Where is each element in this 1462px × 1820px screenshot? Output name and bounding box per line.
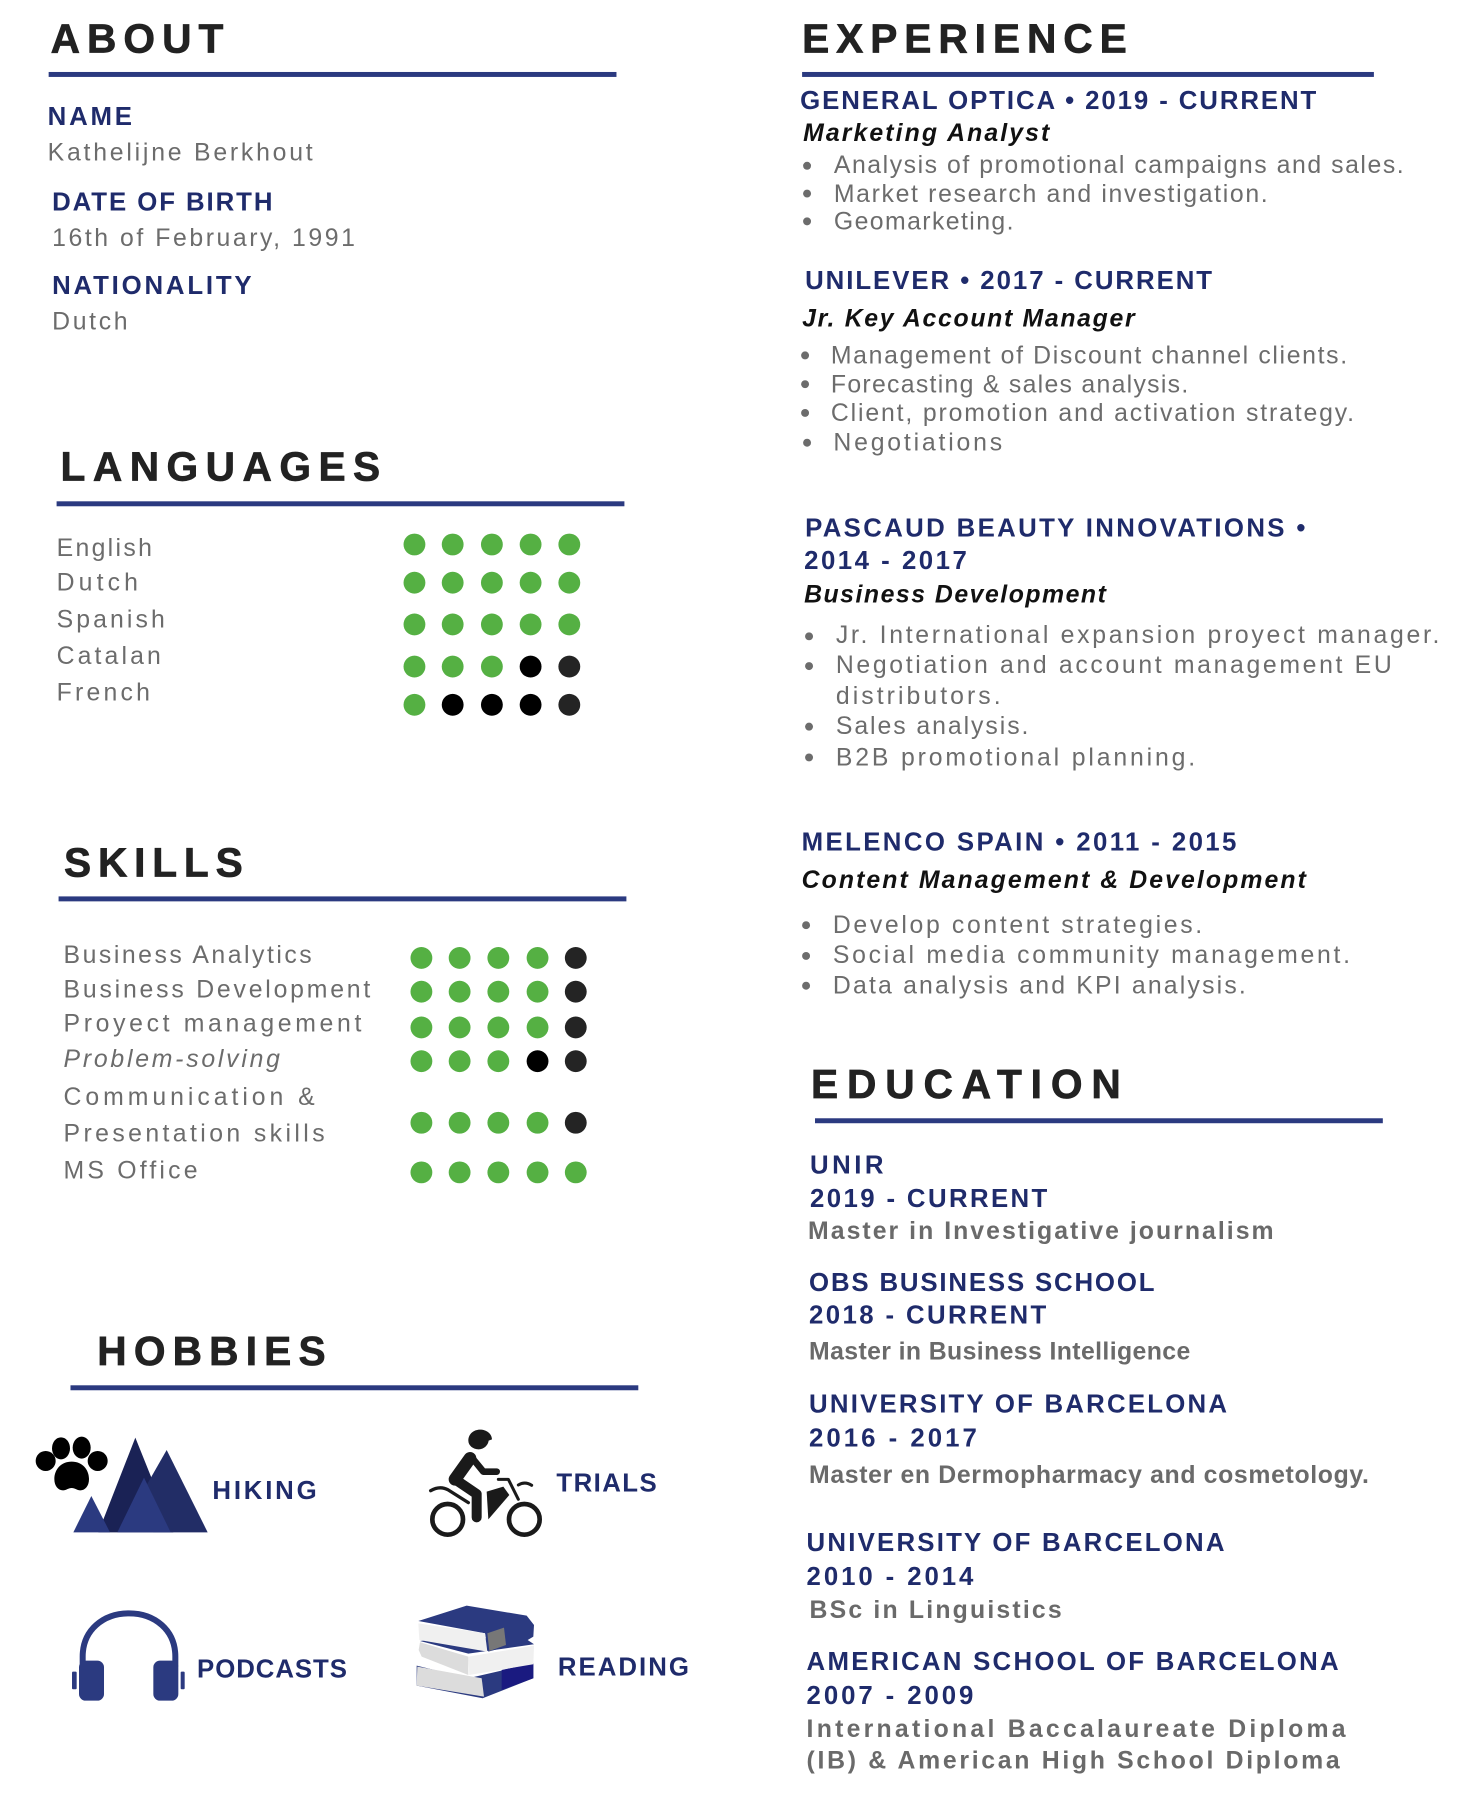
skill: Proyect management: Proyect management: [64, 1010, 361, 1037]
duties list: distributors.: [836, 683, 1001, 710]
label: date of birth: DATE OF BIRTH: [52, 188, 273, 216]
school: University of Barcelona 2016: Master en Dermopharmacy and cosmetology.: [809, 1462, 1369, 1489]
duties list: Geomarketing.: [834, 208, 1014, 235]
skill: Communication and Presentation skills: [64, 1084, 325, 1148]
panel: education: [807, 1061, 1383, 1774]
value: nationality: Dutch: [52, 309, 128, 336]
job: General Optica: [800, 87, 1404, 235]
dot rating: Proyect management: [410, 1017, 587, 1038]
duties list: [801, 342, 1354, 457]
duties list: [802, 912, 1350, 1000]
value: name: Kathelijne Berkhout: [48, 139, 313, 166]
school: American School of Barcelona: 2007 - 2009: [807, 1682, 973, 1710]
duties list: Negotiation and account management EU: [836, 652, 1392, 679]
school: University of Barcelona 2010: [807, 1529, 1224, 1624]
duties list: Data analysis and KPI analysis.: [833, 973, 1246, 1000]
skill: Communication and Presentation skills: Presentation skills: [64, 1121, 325, 1148]
label: hiking: HIKING: [212, 1477, 317, 1505]
dot rating: Communication: [410, 1112, 587, 1134]
duties list: [805, 622, 1439, 771]
job title line: GENERAL OPTICA • 2019 - CURRENT: [800, 87, 1317, 115]
school: University of Barcelona 2016: 2016 - 2017: [809, 1424, 977, 1452]
job title lines: [804, 515, 1305, 575]
job title line: UNILEVER • 2017 - CURRENT: [805, 267, 1212, 295]
duties list: B2B promotional planning.: [836, 744, 1195, 771]
language: Spanish: Spanish: [57, 606, 165, 633]
school: University of Barcelona 2010: 2010 - 2014: [807, 1563, 974, 1591]
language: Dutch: Dutch: [57, 570, 138, 597]
label: name: NAME: [48, 103, 132, 131]
school: OBS Business School: OBS BUSINESS SCHOOL: [809, 1269, 1155, 1297]
heading: about: ABOUT: [51, 16, 224, 62]
skill: Business Development: Business Development: [64, 977, 370, 1004]
dot rating: MS Office: [410, 1161, 587, 1183]
school: OBS Business School: 2018 - CURRENT: [809, 1302, 1047, 1330]
duties list: Client, promotion and activation strategy.: [831, 400, 1354, 427]
language: French: French: [57, 679, 150, 706]
duties list: Management of Discount channel clients.: [831, 342, 1347, 369]
dot rating: Catalan: [404, 656, 580, 678]
role: Marketing Analyst: [803, 120, 1051, 147]
dot rating: Spanish: [404, 613, 580, 635]
school: UNIR: 2019 - CURRENT: [810, 1185, 1048, 1213]
skill: Communication and Presentation skills: Communication &: [64, 1084, 315, 1111]
heading: languages: LANGUAGES: [61, 443, 380, 489]
school: University of Barcelona 2016: UNIVERSITY OF BARCELONA: [809, 1391, 1227, 1419]
heading: education: EDUCATION: [811, 1061, 1121, 1107]
school: University of Barcelona 2010: BSc in Linguistics: [810, 1597, 1062, 1624]
dot rating: Business Analytics: [410, 947, 587, 969]
job title line: MELENCO SPAIN • 2011 - 2015: [802, 829, 1236, 857]
value: date of birth: 16th of February, 1991: [52, 225, 355, 252]
job: Melenco Spain: [802, 829, 1350, 1000]
school: OBS Business School: [809, 1269, 1190, 1365]
job: Unilever: [801, 267, 1354, 457]
duties list: Forecasting & sales analysis.: [831, 372, 1188, 399]
school: UNIR: Master in Investigative journalism: [808, 1218, 1274, 1245]
skill: Business Analytics: Business Analytics: [64, 942, 312, 969]
duties list: Jr. International expansion proyect manager.: [836, 622, 1439, 649]
label: trials: TRIALS: [556, 1470, 657, 1498]
skill: MS Office: MS Office: [64, 1157, 198, 1184]
duties list: Social media community management.: [833, 942, 1350, 969]
school: University of Barcelona 2010: UNIVERSITY OF BARCELONA: [807, 1529, 1224, 1557]
school: American School of Barcelona: (IB) & American High School Diploma: [807, 1747, 1340, 1774]
school: American School of Barcelona: [807, 1648, 1346, 1774]
dot rating: Problem-solving: [410, 1050, 587, 1072]
duties list: [803, 152, 1404, 235]
skill: Problem-solving: Problem-solving: [64, 1046, 280, 1073]
icon: mountains: [73, 1438, 208, 1532]
dot rating: Business Development: [410, 981, 587, 1003]
dot rating: French: [404, 694, 580, 716]
school: UNIR: [808, 1151, 1274, 1245]
heading: experience: EXPERIENCE: [802, 16, 1127, 62]
heading: hobbies: HOBBIES: [97, 1328, 326, 1374]
school: UNIR: UNIR: [810, 1151, 884, 1179]
language: English: English: [57, 535, 152, 562]
job: Pascaud Beauty Innovations: [804, 515, 1439, 771]
icon: headphones: [72, 1613, 185, 1701]
language: Catalan: Catalan: [57, 643, 161, 670]
job title lines: 2014 - 2017: [804, 547, 967, 575]
school: University of Barcelona 2016: [809, 1391, 1369, 1489]
duties list: Develop content strategies.: [833, 912, 1202, 939]
heading: skills: SKILLS: [64, 840, 243, 886]
school: American School of Barcelona: International Baccalaureate Diploma: [807, 1716, 1346, 1743]
label: nationality: NATIONALITY: [52, 272, 252, 300]
icon: motorbike rider: [431, 1430, 540, 1535]
role: Content Management & Development: [802, 867, 1308, 894]
icon: paw print: [36, 1437, 108, 1490]
panel: languages: [57, 443, 624, 716]
duties list: Sales analysis.: [836, 713, 1028, 740]
school: American School of Barcelona: AMERICAN SCHOOL OF BARCELONA: [807, 1648, 1339, 1676]
duties list: Market research and investigation.: [834, 181, 1268, 208]
role: Business Development: [804, 582, 1108, 609]
panel: hobbies: [36, 1328, 689, 1701]
panel: skills: [59, 840, 626, 1184]
school: OBS Business School: Master in Business Intelligence: [809, 1338, 1190, 1365]
role: Jr. Key Account Manager: [802, 306, 1136, 333]
icon: stack of books: [417, 1606, 534, 1698]
dot rating: English: [404, 534, 580, 555]
label: reading: READING: [558, 1654, 689, 1682]
panel: about: [48, 16, 616, 336]
label: podcasts: PODCASTS: [197, 1656, 347, 1684]
job title lines: PASCAUD BEAUTY INNOVATIONS •: [805, 515, 1305, 543]
dot rating: Dutch: [404, 572, 580, 594]
duties list: Analysis of promotional campaigns and sales.: [834, 152, 1404, 179]
panel: experience: [800, 16, 1439, 1000]
duties list: Negotiations: [833, 430, 1002, 457]
